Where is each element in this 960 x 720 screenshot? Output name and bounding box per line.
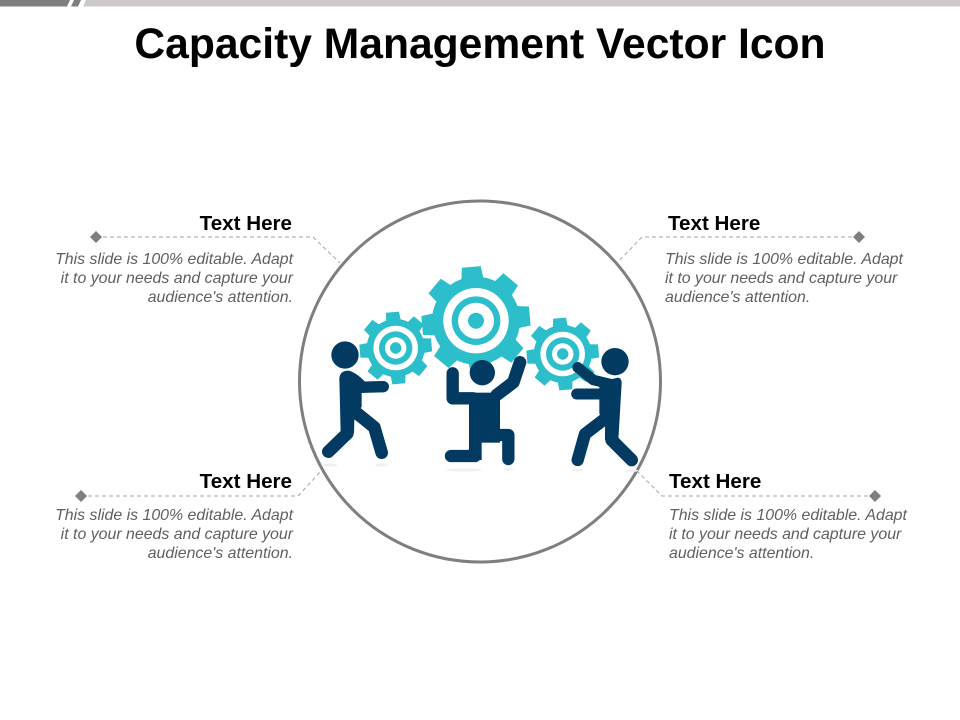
callout body: top right: audience's attention. — [665, 289, 810, 306]
callout body: bottom left: audience's attention. — [148, 545, 293, 562]
icon: large gear — [421, 266, 531, 376]
callout body: bottom left — [55, 507, 294, 562]
icon: left gear — [359, 311, 432, 385]
callout body: top left: audience's attention. — [148, 289, 293, 306]
icon: middle person — [446, 360, 520, 472]
callout body: top left — [55, 251, 294, 306]
connector: bottom left — [75, 470, 322, 502]
icon: right person — [572, 348, 638, 472]
callout body: bottom right: it to your needs and capture your — [669, 526, 901, 543]
callout body: top left: This slide is 100% editable. Adapt — [55, 251, 293, 268]
callout heading: bottom right: Text Here — [669, 470, 761, 493]
connector: top left — [90, 231, 340, 263]
top decorative bar — [0, 0, 960, 6]
callout body: bottom right: This slide is 100% editable. Adapt — [669, 507, 907, 524]
callout body: bottom left: it to your needs and capture your — [61, 526, 293, 543]
title: Capacity Management Vector Icon — [134, 20, 826, 68]
callout body: top right — [665, 251, 904, 306]
callout body: top right: This slide is 100% editable. Adapt — [665, 251, 903, 268]
callout body: top right: it to your needs and capture your — [665, 270, 897, 287]
connector: top right — [618, 231, 865, 262]
callout heading: bottom left: Text Here — [200, 470, 292, 493]
callout body: bottom right: audience's attention. — [669, 545, 814, 562]
icon: right gear — [526, 317, 599, 391]
callout body: bottom right — [669, 507, 908, 562]
callout body: top left: it to your needs and capture your — [61, 270, 293, 287]
callout heading: top left: Text Here — [200, 212, 292, 235]
callout body: bottom left: This slide is 100% editable. Adapt — [55, 507, 293, 524]
callout heading: top right: Text Here — [668, 212, 760, 235]
connector: bottom right — [638, 472, 881, 502]
icon: left person — [323, 341, 388, 467]
circle outline — [300, 201, 660, 562]
